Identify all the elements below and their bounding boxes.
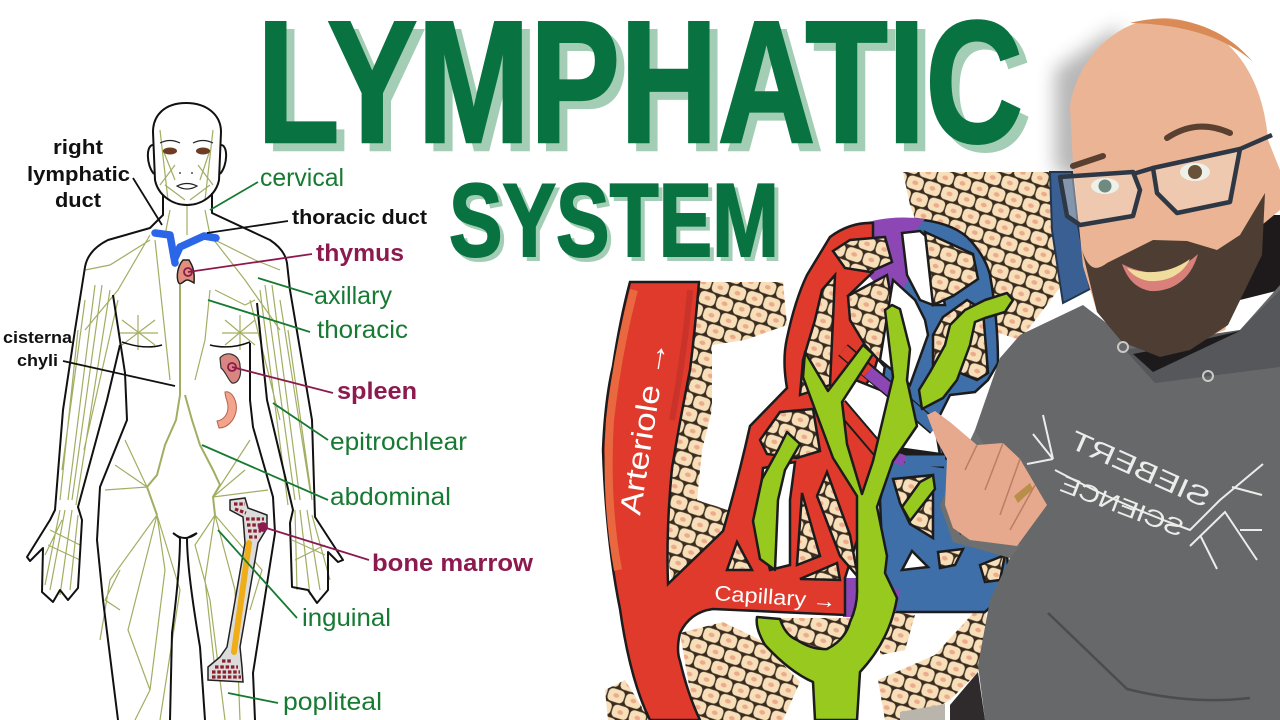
chest and shoulder — [85, 235, 280, 380]
left leg — [100, 440, 180, 720]
green labels: inguinal — [302, 604, 391, 632]
magenta labels — [316, 240, 533, 577]
label: thoracic duct: thoracic duct — [292, 207, 427, 229]
green labels: popliteal — [283, 688, 382, 716]
green leader lines — [202, 182, 328, 703]
hoodie logo text: SCIENCE — [1056, 471, 1188, 543]
label: cisterna chyli: chyli — [17, 351, 58, 370]
title: SYSTEM: SYSTEM — [449, 163, 779, 279]
red arteriole and capillaries — [603, 223, 880, 720]
black label: right lymphatic duct: right — [53, 137, 103, 159]
blue chair — [1050, 172, 1090, 303]
black label: right lymphatic duct — [27, 137, 130, 212]
spleen organ — [220, 354, 241, 383]
black label: right lymphatic duct: lymphatic — [27, 164, 130, 186]
face lymphatics — [160, 130, 213, 235]
ring — [1014, 483, 1033, 503]
thoracic trunk — [147, 285, 220, 515]
green labels: cervical — [260, 164, 344, 192]
green lymphatic vessel — [753, 293, 1013, 720]
hood collar shade — [1125, 290, 1280, 383]
hoodie logo text — [1056, 425, 1215, 543]
presenter photo — [900, 18, 1280, 720]
diagonal capillary bands — [840, 350, 945, 461]
green labels: thoracic — [317, 316, 408, 344]
head — [1070, 18, 1280, 354]
label: Arteriole: Arteriole → — [614, 338, 674, 517]
soft shadow — [1055, 25, 1120, 200]
logo tree — [1027, 415, 1263, 569]
dark jacket — [950, 672, 985, 720]
magenta labels: spleen — [337, 378, 417, 405]
kidney organ — [217, 392, 236, 428]
right arm — [250, 285, 312, 505]
label: cisterna chyli: cisterna — [3, 328, 73, 347]
green labels: abdominal — [330, 483, 451, 511]
label: Capillary: Capillary → — [714, 582, 837, 613]
body outline — [27, 103, 343, 720]
grommets — [1118, 342, 1213, 381]
eyebrows — [1073, 127, 1230, 166]
lymph vessels — [45, 130, 330, 720]
black label: right lymphatic duct: duct — [55, 190, 101, 212]
lips — [1122, 254, 1198, 291]
right leg — [195, 440, 268, 720]
hoodie logo text: SIEBERT — [1066, 425, 1215, 513]
face features — [160, 140, 213, 189]
green labels — [260, 164, 467, 716]
bone marrow femur — [208, 498, 267, 682]
breast tangles — [120, 315, 258, 350]
hoodie — [950, 285, 1280, 720]
label: cisterna chyli — [3, 328, 73, 370]
dark background — [1240, 215, 1280, 300]
left hand — [45, 510, 80, 595]
arteriole highlight — [609, 290, 634, 570]
magenta labels: bone marrow — [372, 550, 533, 577]
teeth — [1127, 259, 1190, 281]
hand thumbs up — [927, 411, 1047, 546]
black leader lines — [63, 178, 288, 386]
glasses — [1060, 135, 1272, 225]
green labels: epitrochlear — [330, 428, 467, 456]
blue ducts — [155, 233, 216, 263]
blue venule — [880, 219, 1010, 612]
left arm — [60, 285, 118, 505]
tissue cells — [605, 172, 1062, 720]
purple junctions — [843, 218, 925, 617]
magenta labels: thymus — [316, 240, 404, 267]
finger creases — [965, 443, 1035, 530]
right hand — [292, 510, 330, 595]
capillary bed diagram — [603, 172, 1062, 720]
fur trim — [900, 704, 945, 720]
hoodie pocket — [1048, 613, 1250, 700]
sleeve and watch — [940, 430, 1020, 558]
beard — [1082, 193, 1265, 357]
arteriole shade — [672, 290, 690, 420]
green labels: axillary — [314, 282, 392, 310]
network holes — [727, 231, 1005, 582]
undershirt — [1133, 331, 1240, 372]
magenta leader lines — [184, 254, 369, 560]
eyes — [1091, 163, 1210, 194]
thymus organ — [177, 260, 194, 284]
hair top — [1130, 19, 1253, 62]
title: SYSTEM: SYSTEM — [453, 167, 783, 283]
